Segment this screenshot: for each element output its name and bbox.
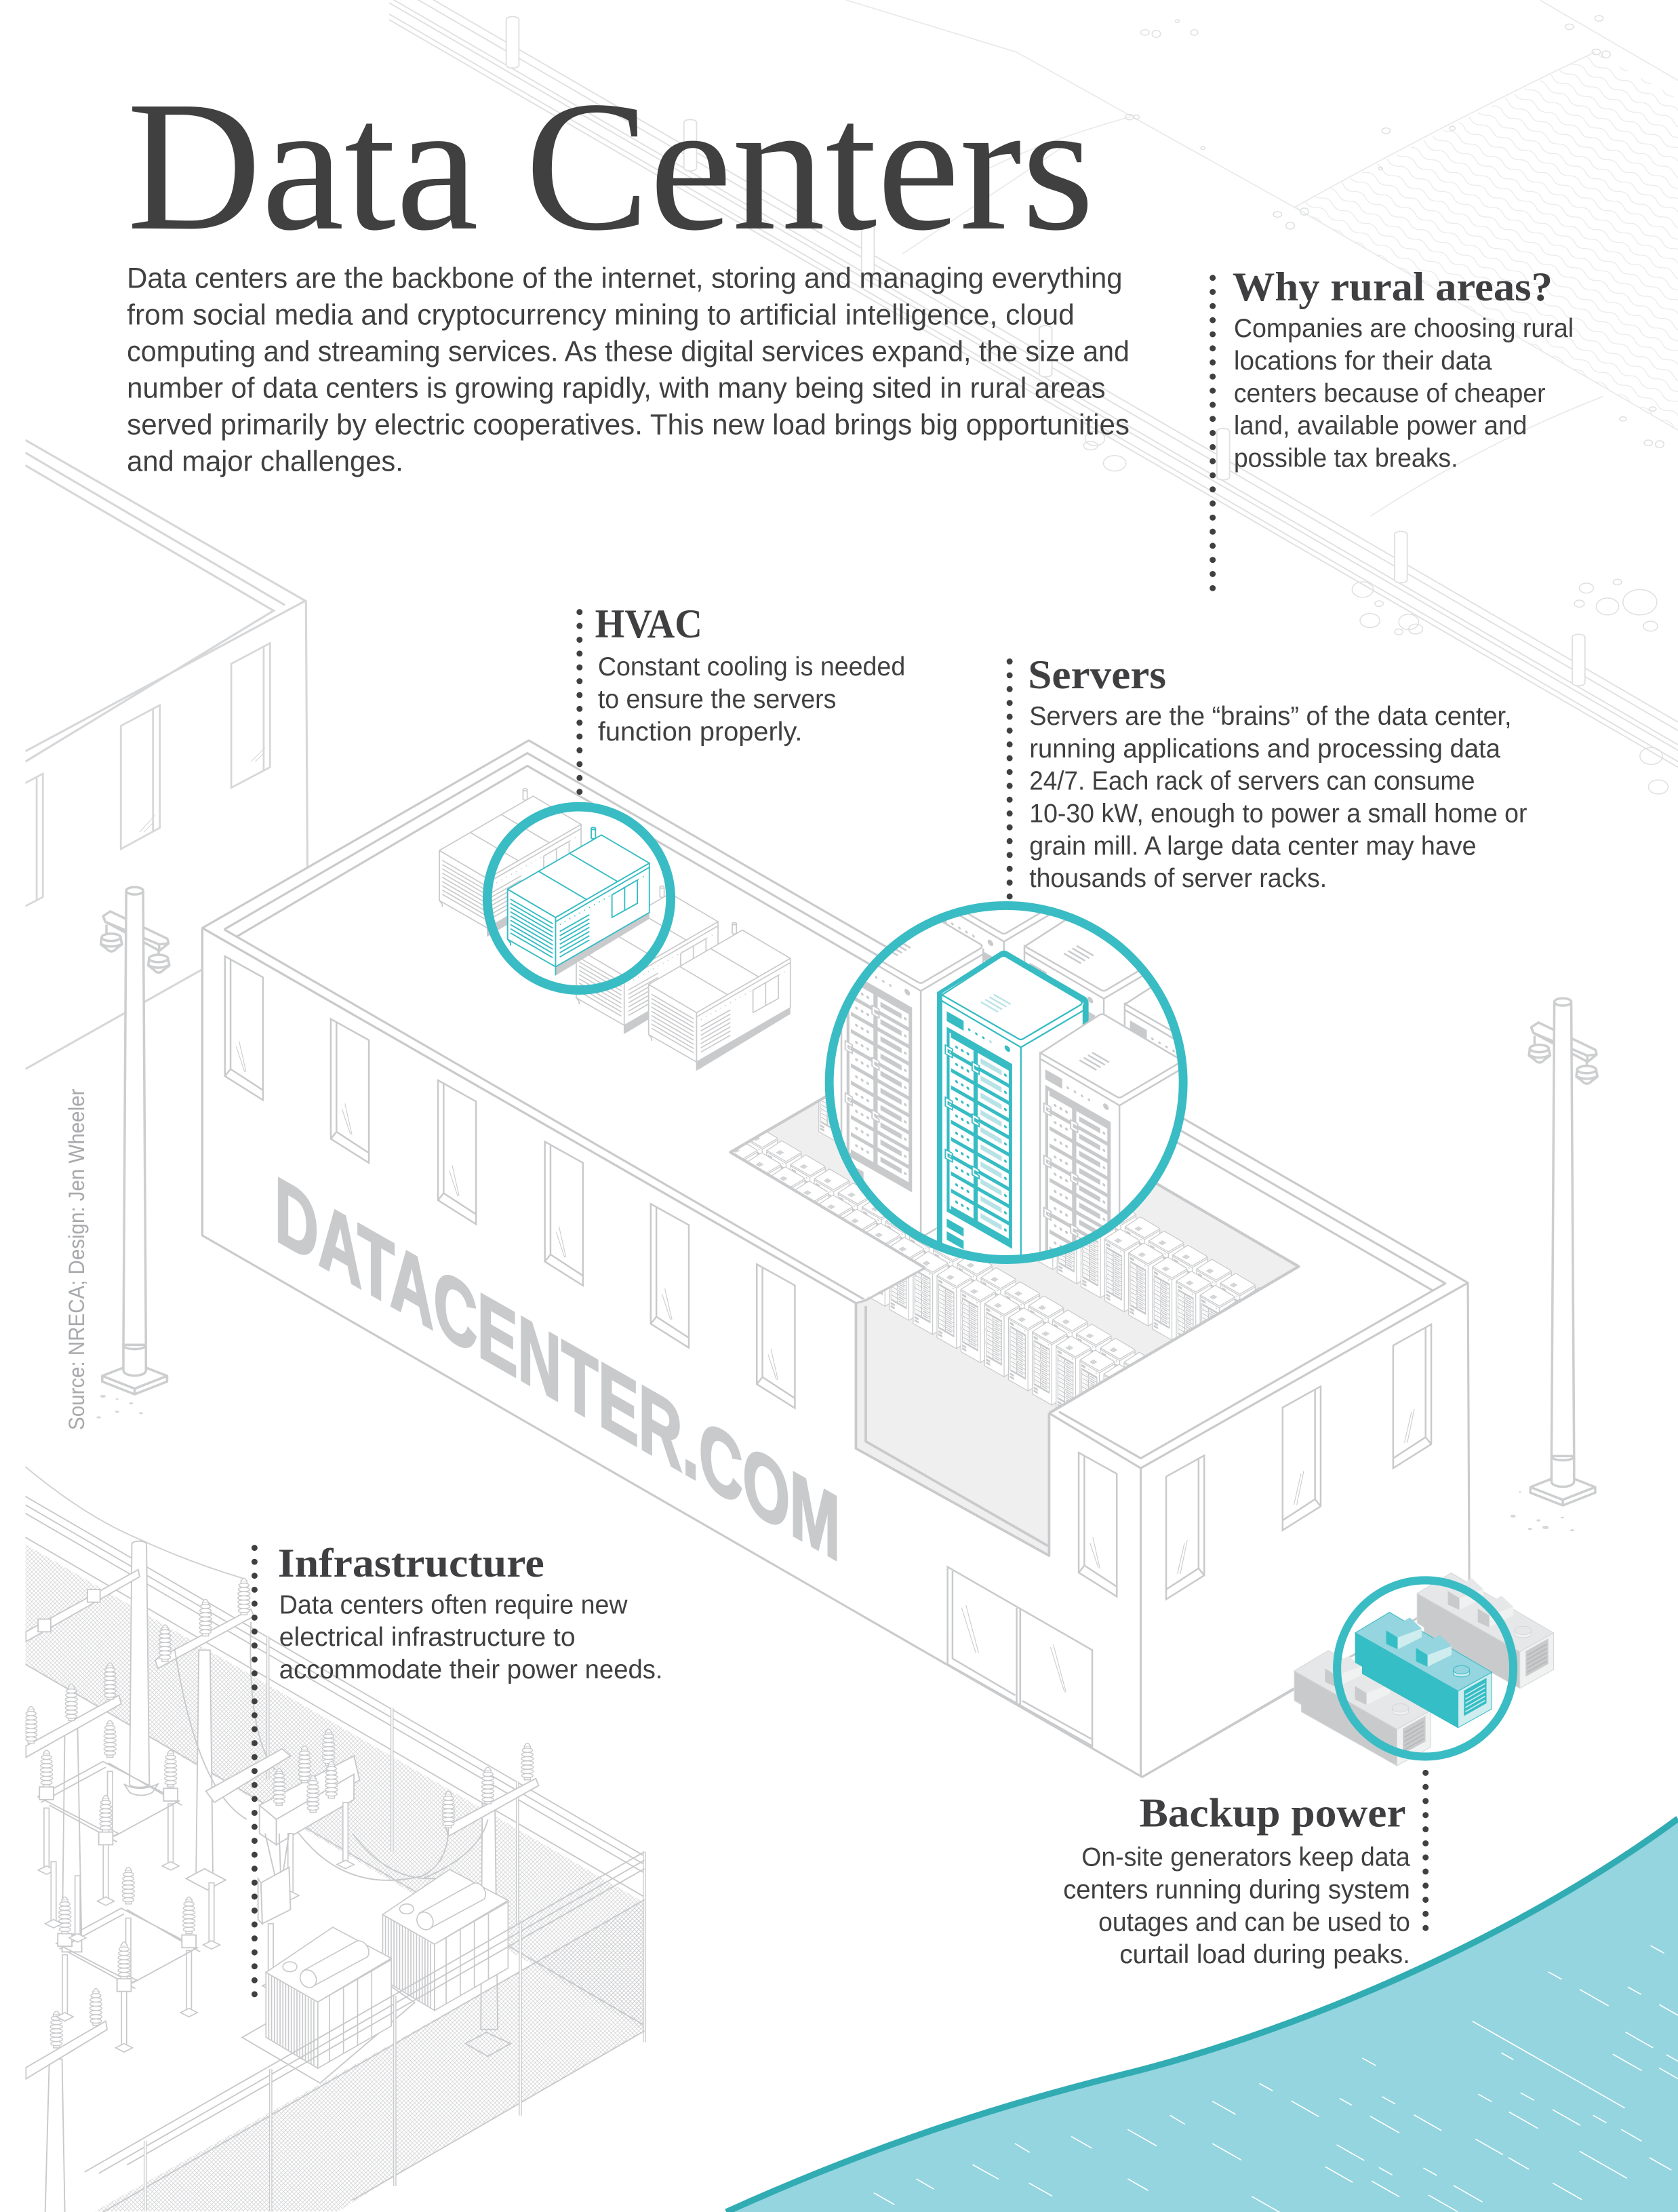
- background: split-rail fence: [389, 0, 1678, 767]
- main building windows: [225, 956, 1431, 1600]
- intro paragraph: from social media and cryptocurrency mining to artificial intelligence, cloud: [127, 298, 1075, 331]
- gravel around poles: [96, 1395, 1574, 1531]
- substation front fence: [85, 1852, 644, 2212]
- data hall floor opening: [730, 1044, 1299, 1556]
- background: fields and wave pattern: [846, 0, 1678, 794]
- callout: infrastructure: Infrastructure: [278, 1541, 544, 1586]
- highlighted teal server rack: [937, 951, 1089, 1255]
- background building: [24, 440, 307, 1069]
- substation illustration: [25, 1467, 644, 2212]
- callout: backup power: outages and can be used to: [1098, 1908, 1410, 1937]
- callout: why rural areas: land, available power and: [1234, 412, 1527, 441]
- callout: servers: Servers: [1028, 652, 1166, 698]
- callout: infrastructure: accommodate their power needs.: [279, 1655, 663, 1684]
- intro paragraph: and major challenges.: [127, 446, 403, 478]
- callout: why rural areas: locations for their data: [1234, 347, 1492, 376]
- callout: servers: thousands of server racks.: [1029, 864, 1327, 893]
- intro paragraph: computing and streaming services. As these digital services expand, the size and: [127, 335, 1130, 368]
- callout: backup power: [1063, 1773, 1426, 1969]
- callout: HVAC: HVAC: [595, 601, 702, 647]
- callout: servers: grain mill. A large data center may have: [1029, 831, 1477, 861]
- intro paragraph: number of data centers is growing rapidly, with many being sited in rural areas: [127, 372, 1106, 405]
- intro paragraph: Data centers are the backbone of the internet, storing and managing everything: [127, 262, 1123, 294]
- water ripples: [874, 1946, 1678, 2212]
- callout circle: server racks: [824, 901, 1188, 1264]
- main building walls and roof: [202, 740, 1469, 1777]
- intro paragraph: [127, 262, 1130, 478]
- callout: HVAC: to ensure the servers: [598, 685, 836, 714]
- title: Data Centers: [127, 63, 1094, 269]
- callout: infrastructure: [254, 1541, 663, 1997]
- callout: servers: 10-30 kW, enough to power a small home or: [1029, 799, 1527, 829]
- callout: HVAC: function properly.: [598, 717, 802, 747]
- water: [726, 1819, 1678, 2212]
- callout: why rural areas: centers because of cheaper: [1234, 379, 1546, 408]
- callout: why rural areas: [1213, 264, 1574, 591]
- floor opening edges: [202, 928, 1299, 1556]
- intro paragraph: served primarily by electric cooperatives. This new load brings big opportunities: [127, 409, 1130, 441]
- background building windows: [24, 643, 270, 907]
- light pole: right: [1529, 998, 1597, 1505]
- substation switch frames: [38, 1622, 488, 2052]
- callout: servers: [1010, 652, 1527, 900]
- callout: why rural areas: Companies are choosing rural: [1234, 314, 1574, 343]
- callout: backup power: Backup power: [1140, 1790, 1406, 1836]
- callout: infrastructure: Data centers often require new: [279, 1590, 628, 1619]
- source credit: Source: NRECA; Design: Jen Wheeler: [64, 1088, 89, 1430]
- rows of server racks: [734, 1099, 1260, 1408]
- callout: backup power: On-site generators keep data: [1081, 1843, 1410, 1872]
- central switchgear: [206, 1729, 359, 1990]
- callout: why rural areas: Why rural areas?: [1233, 264, 1553, 310]
- backup generators with callout circle: [1294, 1573, 1554, 1766]
- illustration: floor-level racks and data hall: [202, 740, 1469, 1777]
- callout: backup power: centers running during system: [1063, 1875, 1410, 1904]
- callout: infrastructure: electrical infrastructure to: [279, 1623, 576, 1652]
- pad-mounted transformers: [242, 1870, 508, 2083]
- substation back fence: [25, 1467, 644, 2042]
- callout: HVAC: Constant cooling is needed: [598, 652, 905, 682]
- entrance doors: [948, 1567, 1092, 1746]
- callout: servers: Servers are the “brains” of the data center,: [1029, 702, 1512, 731]
- callout: HVAC: [580, 601, 905, 799]
- highlighted teal generator: [1355, 1612, 1493, 1729]
- wall sign: DATACENTER.COM: DATACENTER.COM: [275, 1156, 840, 1581]
- callout: backup power: curtail load during peaks.: [1119, 1940, 1410, 1969]
- callout: why rural areas: possible tax breaks.: [1234, 443, 1458, 473]
- callout: servers: running applications and processing data: [1029, 734, 1500, 764]
- substation poles and crossarms: [25, 1541, 538, 2212]
- callout: servers: 24/7. Each rack of servers can consume: [1029, 767, 1475, 796]
- light pole: left: [101, 887, 169, 1394]
- callout circle: HVAC units on the roof: [439, 789, 791, 1071]
